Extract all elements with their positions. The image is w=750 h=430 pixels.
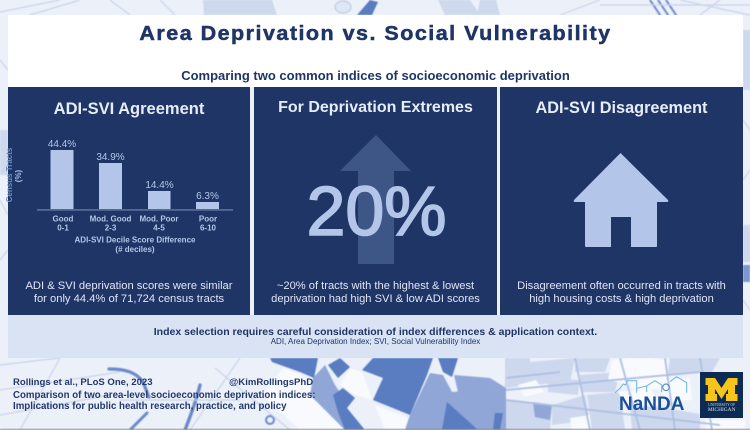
bottom block grid: [505, 358, 720, 430]
caption: ~20% of tracts with the highest & lowest: [277, 280, 474, 292]
medium tracts: [310, 365, 552, 430]
caption: high housing costs & high deprivation: [529, 293, 714, 305]
title: Area Deprivation vs. Social Vulnerability: [139, 22, 612, 45]
caption: [271, 280, 480, 305]
key message: Index selection requires careful consideration of index differences & application context.: [154, 326, 597, 338]
bar chart: 34.9%: [96, 152, 125, 163]
citation: Comparison of two area-level socioeconomic deprivation indices:: [13, 390, 316, 401]
bar chart: (# deciles): [115, 245, 155, 254]
caption: for only 44.4% of 71,724 census tracts: [34, 293, 224, 305]
panel: ADI-SVI disagreement: [500, 87, 743, 315]
panel: deprivation extremes: [254, 87, 497, 315]
caption: Disagreement often occurred in tracts with: [517, 280, 726, 292]
bar chart: ADI-SVI Decile Score Difference: [75, 236, 196, 244]
dark blue tracts: [270, 358, 503, 430]
panel: ADI-SVI agreement: [8, 87, 250, 315]
big number: 20%: [306, 172, 447, 250]
bar chart: 2-3: [105, 224, 117, 232]
bar chart: 4-5: [153, 224, 165, 232]
logo: NaNDA: [614, 376, 688, 415]
caption: ADI & SVI deprivation scores were similar: [25, 280, 233, 292]
caption: [25, 280, 233, 305]
heading: ADI-SVI Disagreement: [536, 99, 707, 117]
icon: house: [574, 153, 668, 247]
caption: deprivation had high SVI & low ADI scores: [271, 293, 480, 305]
heading: For Deprivation Extremes: [278, 99, 473, 116]
bar chart: 44.4%: [48, 139, 76, 150]
citation: Rollings et al., PLoS One, 2023: [13, 377, 153, 388]
bar chart: 6.3%: [196, 191, 219, 202]
panel: conclusion: [8, 315, 743, 358]
roads: [109, 0, 676, 430]
bar chart: Mod. Good: [90, 214, 131, 224]
bar chart: 6-10: [200, 224, 217, 232]
citation: [13, 377, 316, 412]
bar chart: 0-1: [57, 224, 69, 232]
bar chart: 14.4%: [145, 180, 174, 191]
subtitle: Comparing two common indices of socioeconomic deprivation: [181, 68, 570, 83]
bar chart: Good: [53, 214, 74, 224]
icon: up arrow: [340, 135, 411, 264]
caption: [517, 280, 726, 305]
handle: @KimRollingsPhD: [229, 377, 313, 388]
bar chart: Mod. Poor: [139, 214, 179, 224]
logo: University of Michigan: UNIVERSITY OF: [708, 403, 735, 407]
citation: Implications for public health research, practice, and policy: [13, 400, 286, 412]
heading: ADI-SVI Agreement: [54, 100, 204, 118]
logo: NaNDA: NaNDA: [619, 394, 684, 415]
logo: University of Michigan: MICHIGAN: [707, 407, 735, 413]
bar chart: Poor: [199, 214, 217, 224]
header panel: [8, 15, 743, 87]
abbreviations: ADI, Area Deprivation Index; SVI, Social Vulnerability Index: [271, 337, 480, 346]
bar chart: (%): [14, 169, 23, 182]
logo: University of Michigan: [700, 372, 743, 418]
bar chart: [6, 139, 233, 254]
